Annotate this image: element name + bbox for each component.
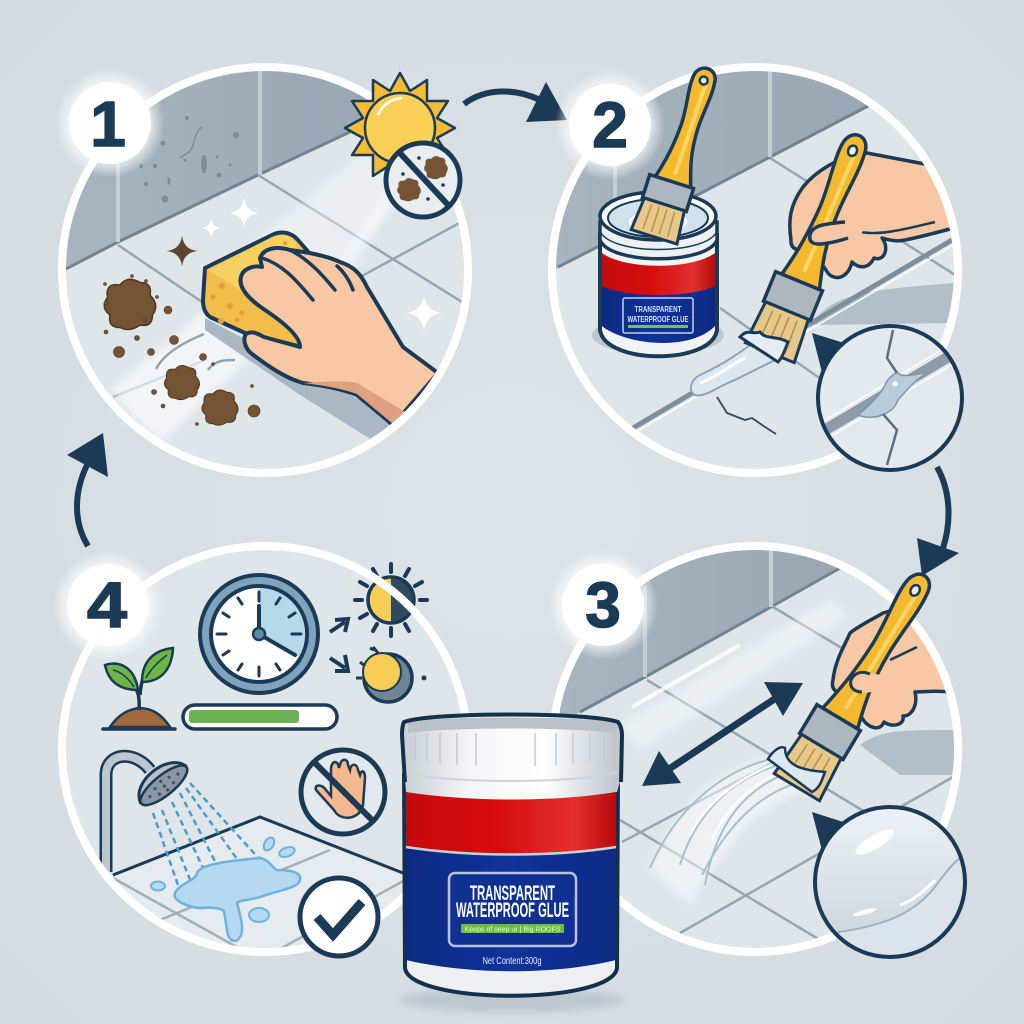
callout: crack magnifier: [812, 326, 962, 470]
ring: [552, 546, 958, 952]
lid shading and ridges: [406, 718, 618, 781]
wiped clean band: [110, 313, 247, 443]
panel: step 3 spread thin layer: [548, 540, 975, 960]
jar shadow: [398, 988, 626, 1012]
icon: half sun: [355, 564, 427, 636]
panel: step 2 apply with brush: [550, 60, 970, 480]
hand shadow: [205, 318, 376, 439]
sponge: [203, 233, 350, 347]
arrow to night: [330, 655, 348, 671]
wall stains: [139, 116, 239, 202]
thumb and glue on bristles: [768, 668, 903, 792]
thumb and bristle glue: [740, 187, 885, 362]
glossy strip on floor: [620, 600, 850, 750]
badge: number 2: 2: [592, 89, 628, 161]
ring: [62, 546, 468, 952]
lid outline: [402, 714, 622, 782]
brush on grout: [745, 125, 883, 363]
water spray: [153, 783, 263, 887]
arrow: step 4 to step 1: [67, 433, 108, 546]
jar body: [404, 775, 618, 996]
floor: [100, 817, 403, 960]
jar: small: [592, 192, 724, 356]
hand shadow: [860, 730, 960, 775]
jar lid fill: [402, 714, 622, 801]
ring: [552, 67, 958, 473]
icon: sun: [345, 73, 455, 183]
badge: number 1: 1: [90, 88, 126, 160]
panel: step 4 cure and test: [53, 540, 470, 960]
cracks: [717, 397, 776, 434]
badge: number 1: [55, 68, 165, 178]
icon: clock: [200, 575, 318, 693]
arrow: back and forth: [642, 682, 803, 786]
arrow: step 2 to step 3: [917, 467, 959, 576]
brush in jar: [631, 61, 730, 244]
sparkles: [166, 198, 442, 331]
grout joint: [633, 240, 952, 428]
label title line 2: WATERPROOF GLUE: [456, 899, 569, 922]
red band: [406, 792, 616, 854]
water puddle: [151, 836, 300, 941]
badge: number 3: 3: [585, 569, 621, 641]
icon: moon: [356, 647, 426, 702]
tile wall: [60, 60, 365, 272]
hand on sponge: [241, 248, 438, 425]
panel: step 1 clean the surface: [55, 60, 470, 480]
badge: number 3: [548, 550, 658, 660]
floor grout: [720, 158, 960, 382]
blue band: [406, 848, 616, 971]
arrow: step 1 to step 2: [464, 82, 567, 122]
light beams: [268, 156, 392, 260]
label green strip: [461, 924, 564, 933]
icon: shower: [106, 753, 193, 872]
icon: no dirt: [386, 143, 460, 217]
glue strokes: [650, 757, 810, 905]
ring: [62, 67, 468, 473]
net content: Net Content:300g: [482, 956, 542, 967]
icon: do not touch: [301, 750, 385, 834]
icon: seedling: [103, 648, 175, 729]
icon: check mark: [300, 878, 378, 956]
badge: number 4: 4: [87, 569, 127, 641]
floor grout: [620, 607, 953, 940]
progress bar: [183, 705, 337, 729]
badge: number 4: [53, 550, 163, 660]
badge: number 2: [555, 70, 665, 180]
strip text: Keeps of seep ur | Big ROOFS: [464, 926, 561, 934]
arrow to day: [330, 619, 348, 632]
jar: small: TRANSPARENT: [634, 305, 682, 314]
label title line 1: TRANSPARENT: [470, 882, 555, 905]
hand holding brush: [830, 610, 946, 730]
hand holding brush: [790, 153, 970, 278]
hand shadow: [812, 283, 955, 325]
dirt clumps and specks: [104, 274, 260, 426]
tile wall: [560, 540, 845, 715]
glue smear: [691, 345, 775, 395]
brush on floor: [774, 562, 947, 801]
jar: small: WATERPROOF GLUE: [628, 315, 689, 324]
label box: [449, 873, 576, 946]
product jar: [398, 714, 626, 1012]
tile wall: [550, 60, 870, 272]
callout: glossy film magnifier: [812, 807, 965, 960]
floor grout: [113, 175, 470, 397]
